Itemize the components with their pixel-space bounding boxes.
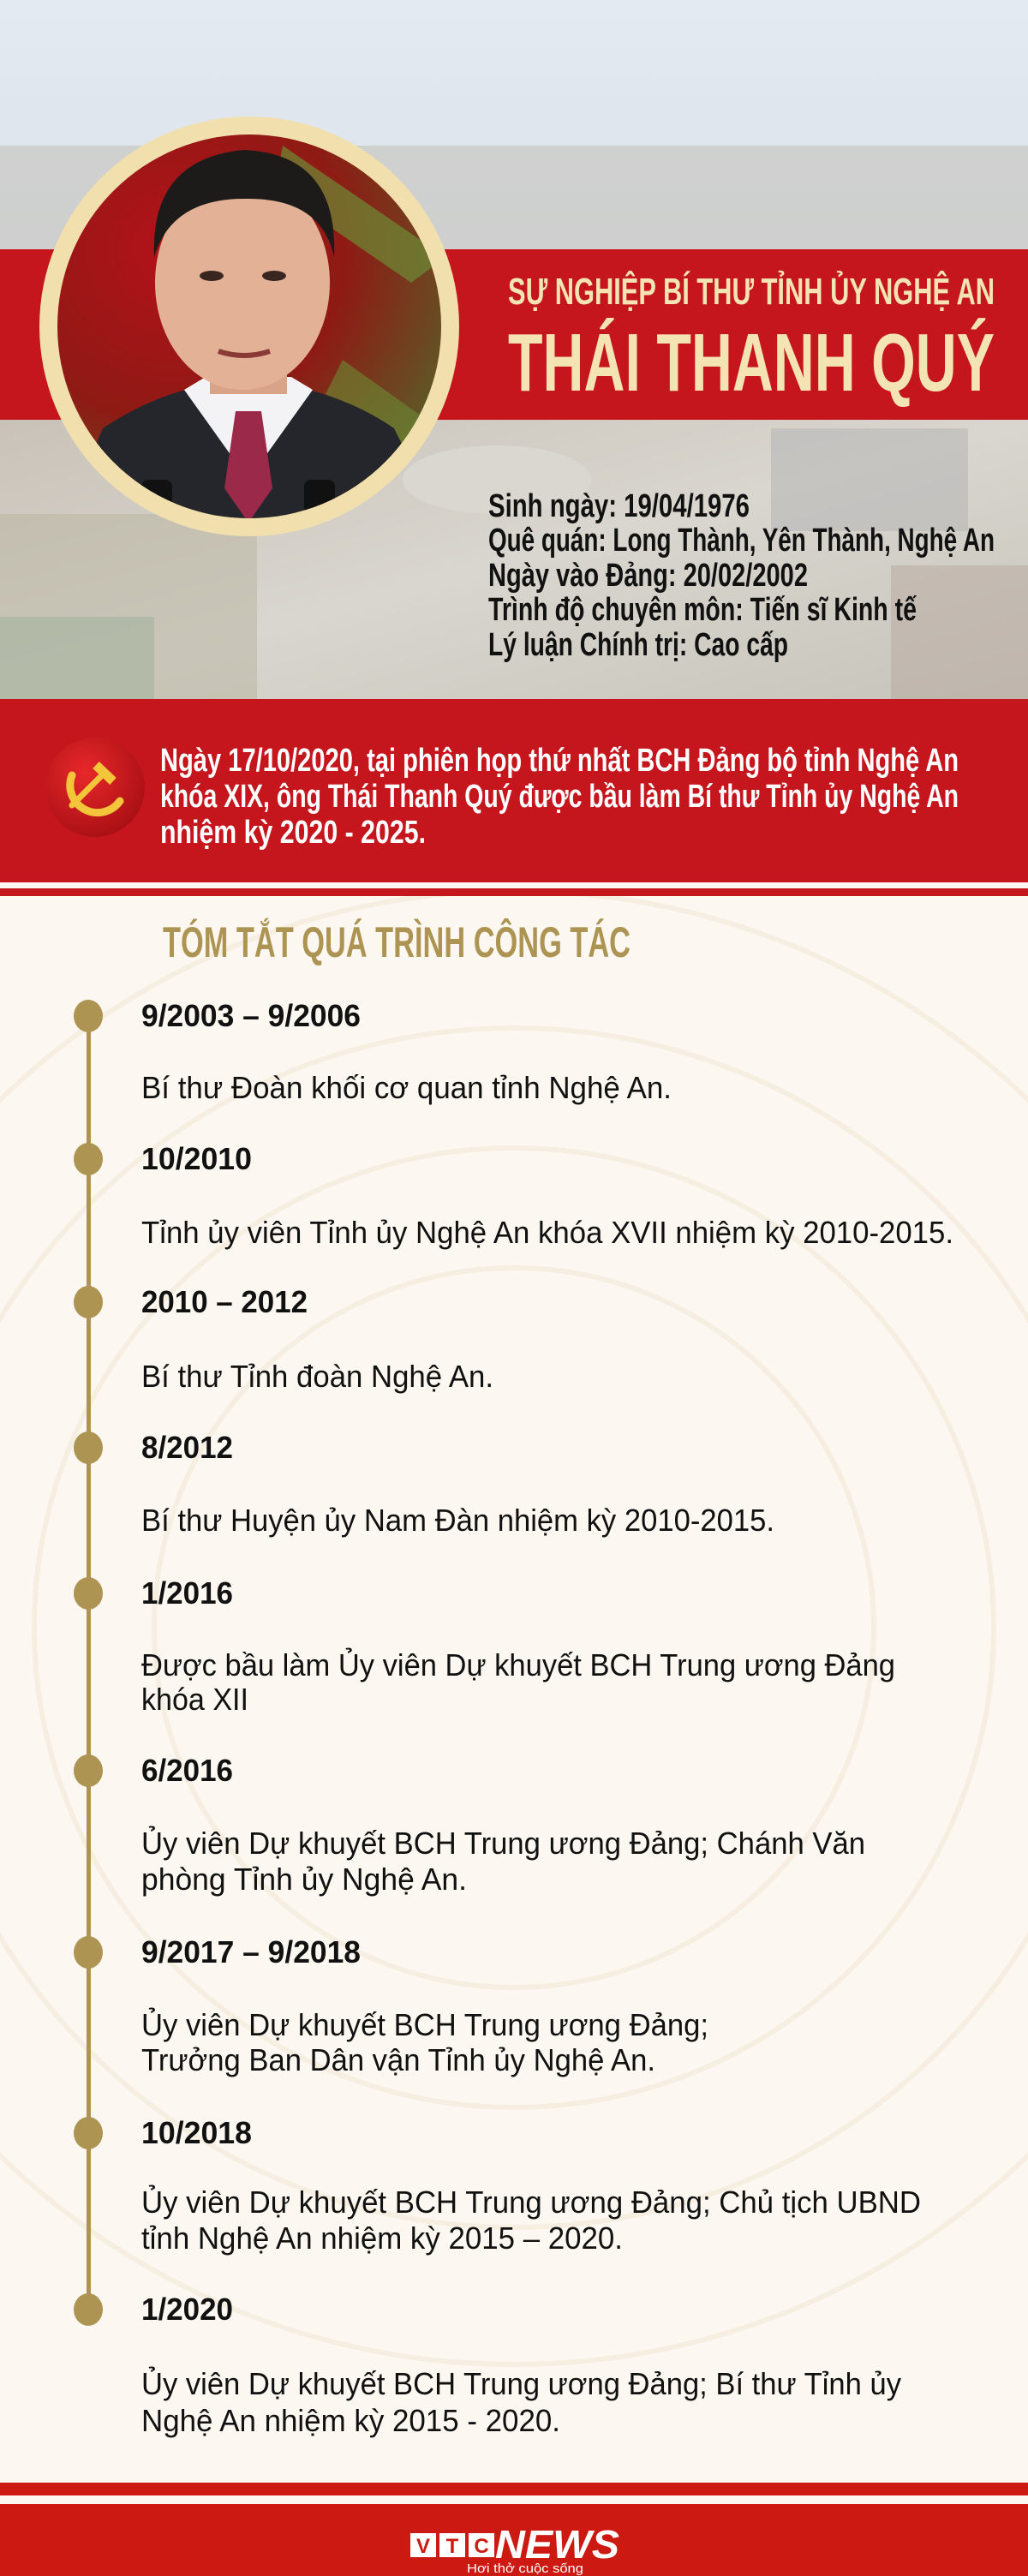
timeline item 7 <box>141 1934 708 2077</box>
timeline item 9: 1/2020 <box>141 2292 233 2327</box>
timeline item 5 <box>141 1575 895 1717</box>
logo: VTC NEWS: C <box>474 2535 489 2558</box>
timeline item 9: Nghệ An nhiệm kỳ 2015 - 2020. <box>141 2403 560 2438</box>
title text block <box>508 269 995 409</box>
heading: career summary: TÓM TẮT QUÁ TRÌNH CÔNG TÁC <box>163 917 631 966</box>
timeline item 8 <box>141 2115 921 2256</box>
timeline item 4: 8/2012 <box>141 1430 233 1465</box>
logo: VTC NEWS: Hơi thở cuộc sống <box>467 2561 583 2576</box>
timeline item 8: 10/2018 <box>141 2115 252 2150</box>
timeline item 9 <box>141 2292 901 2438</box>
personal info <box>488 488 995 663</box>
announcement text: nhiệm kỳ 2020 - 2025. <box>160 815 426 851</box>
logo: VTC NEWS: NEWS <box>495 2522 619 2567</box>
background: sky and city photo <box>0 0 1028 699</box>
timeline item 7: Trưởng Ban Dân vận Tỉnh ủy Nghệ An. <box>141 2042 655 2077</box>
timeline item 8: Ủy viên Dự khuyết BCH Trung ương Đảng; Chủ tịch UBND <box>141 2184 921 2220</box>
timeline item 6: 6/2016 <box>141 1753 233 1788</box>
timeline item 1: 9/2003 – 9/2006 <box>141 998 361 1033</box>
personal info: Ngày vào Đảng: 20/02/2002 <box>488 558 808 594</box>
timeline item 5: khóa XII <box>141 1682 248 1717</box>
timeline item 2: Tỉnh ủy viên Tỉnh ủy Nghệ An khóa XVII nhiệm kỳ 2010-2015. <box>141 1215 953 1250</box>
timeline item 7: 9/2017 – 9/2018 <box>141 1934 361 1969</box>
portrait photo circle <box>39 117 463 548</box>
panel: election announcement <box>0 699 1028 896</box>
timeline item 5: Được bầu làm Ủy viên Dự khuyết BCH Trung ương Đảng <box>141 1647 895 1682</box>
timeline item 6: phòng Tỉnh ủy Nghệ An. <box>141 1862 467 1897</box>
timeline item 2: 10/2010 <box>141 1141 252 1176</box>
timeline item 8: tỉnh Nghệ An nhiệm kỳ 2015 – 2020. <box>141 2220 623 2256</box>
timeline item 6 <box>141 1753 865 1897</box>
timeline item 2 <box>141 1141 953 1250</box>
timeline <box>74 998 953 2438</box>
timeline item 7: Ủy viên Dự khuyết BCH Trung ương Đảng; <box>141 2006 708 2042</box>
announcement text <box>160 743 959 851</box>
timeline item 9: Ủy viên Dự khuyết BCH Trung ương Đảng; Bí thư Tỉnh ủy <box>141 2365 901 2401</box>
red title band <box>0 249 1028 420</box>
timeline item 3: Bí thư Tỉnh đoàn Nghệ An. <box>141 1359 493 1394</box>
timeline item 5: 1/2016 <box>141 1575 233 1611</box>
timeline item 4 <box>141 1430 774 1538</box>
timeline item 1: Bí thư Đoàn khối cơ quan tỉnh Nghệ An. <box>141 1070 672 1105</box>
timeline item 3 <box>141 1284 493 1394</box>
logo: VTC NEWS <box>410 2522 619 2576</box>
timeline item 6: Ủy viên Dự khuyết BCH Trung ương Đảng; Chánh Văn <box>141 1825 865 1861</box>
footer <box>0 2483 1028 2576</box>
timeline item 1 <box>141 998 672 1105</box>
personal info: Lý luận Chính trị: Cao cấp <box>488 627 788 663</box>
timeline item 3: 2010 – 2012 <box>141 1284 308 1319</box>
icon: party flag hammer and sickle <box>45 738 145 837</box>
timeline item 4: Bí thư Huyện ủy Nam Đàn nhiệm kỳ 2010-2015. <box>141 1503 774 1538</box>
background: cream drum pattern <box>0 891 1028 2364</box>
logo: VTC NEWS: V <box>416 2535 430 2558</box>
personal info: Sinh ngày: 19/04/1976 <box>488 488 750 524</box>
logo: VTC NEWS: T <box>446 2535 459 2558</box>
